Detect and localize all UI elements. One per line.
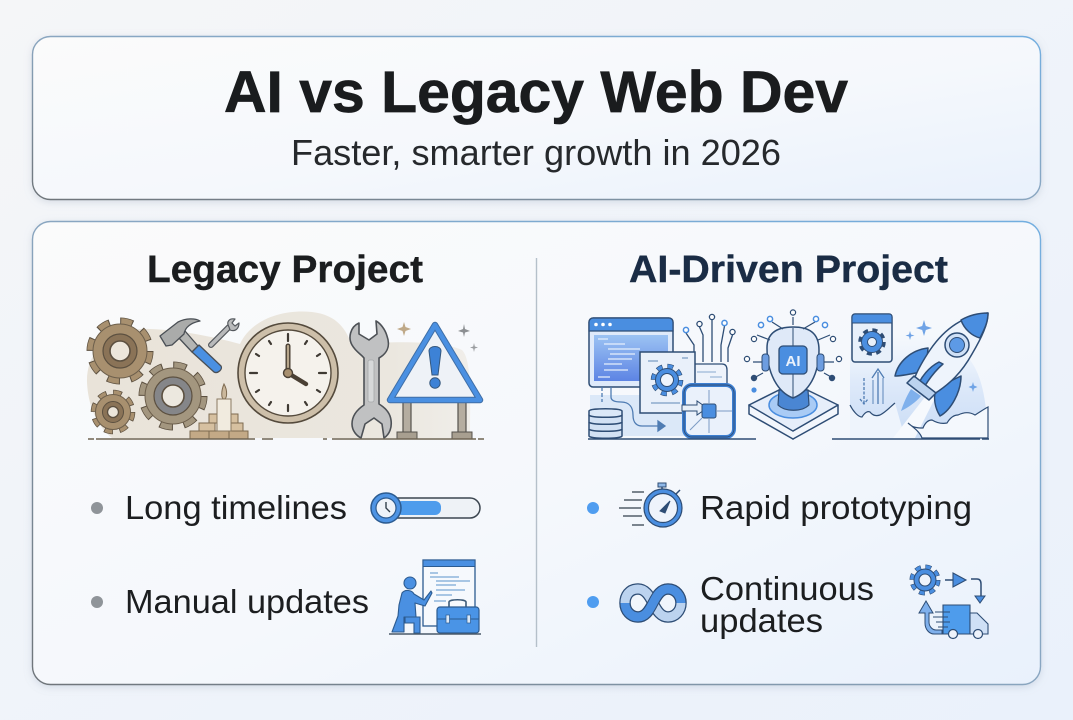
icon: gear large [91, 322, 149, 380]
icon: ai robot head on platform [749, 327, 838, 439]
icon: infinity loop [625, 589, 681, 617]
bullet: long timelines: Long timelines [125, 490, 347, 527]
icon: settings card [640, 352, 695, 413]
icon: gear medium [143, 366, 203, 426]
icon: connector arrows [602, 387, 665, 431]
icon: upward arrows [860, 369, 884, 404]
icon: sparkles [397, 322, 478, 352]
icon: code window [589, 318, 673, 387]
icon: wall clock [238, 323, 338, 423]
icon: hammer [160, 319, 221, 372]
text: continuous updates: Continuous [700, 571, 874, 608]
icon: candle on bricks [190, 384, 248, 439]
icon: blue sparkles [906, 320, 978, 392]
subtitle: Faster, smarter growth in 2026 [291, 132, 781, 173]
icon: large wrench [350, 321, 391, 438]
bullet: rapid prototyping: Rapid prototyping [700, 490, 972, 527]
icon: stopwatch [619, 483, 682, 527]
panel: ai-driven project [587, 249, 989, 640]
panel: legacy project [87, 249, 484, 634]
icon: gear, arrows and delivery truck [912, 568, 988, 638]
bullet: long timelines [91, 490, 480, 527]
title: AI vs Legacy Web Dev [224, 60, 848, 125]
icon: radiating circuit nodes [744, 310, 842, 393]
icon: ai robot head on platform: AI [786, 353, 800, 370]
icon: settings window [852, 314, 892, 362]
comparison panel [32, 222, 1040, 684]
bullet: manual updates [91, 560, 481, 634]
icon: database [589, 409, 622, 438]
bullet: manual updates: Manual updates [125, 584, 369, 621]
illustration: legacy tools, clock and warning sign [87, 311, 484, 439]
bullet: rapid prototyping [587, 483, 972, 527]
illustration: ai workflow, robot head and rocket [588, 310, 989, 439]
icon: rocket [895, 313, 988, 416]
heading: legacy project: Legacy Project [147, 249, 423, 291]
icon: warning sign [390, 325, 480, 439]
text: continuous updates: updates [700, 603, 823, 640]
title panel [32, 36, 1040, 200]
bullet: continuous updates [587, 568, 988, 640]
icon: circuit traces [683, 314, 735, 362]
icon: developer with toolbox [389, 560, 481, 634]
heading: ai-driven project: AI-Driven Project [629, 249, 948, 291]
icon: chip module [682, 385, 734, 437]
text: continuous updates [700, 571, 874, 640]
icon: progress bar with clock [371, 493, 480, 523]
icon: gear small [94, 393, 132, 431]
icon: small wrench [211, 319, 239, 345]
icon: rocket launch backdrop and clouds [850, 334, 988, 438]
icon: server box [690, 364, 727, 392]
